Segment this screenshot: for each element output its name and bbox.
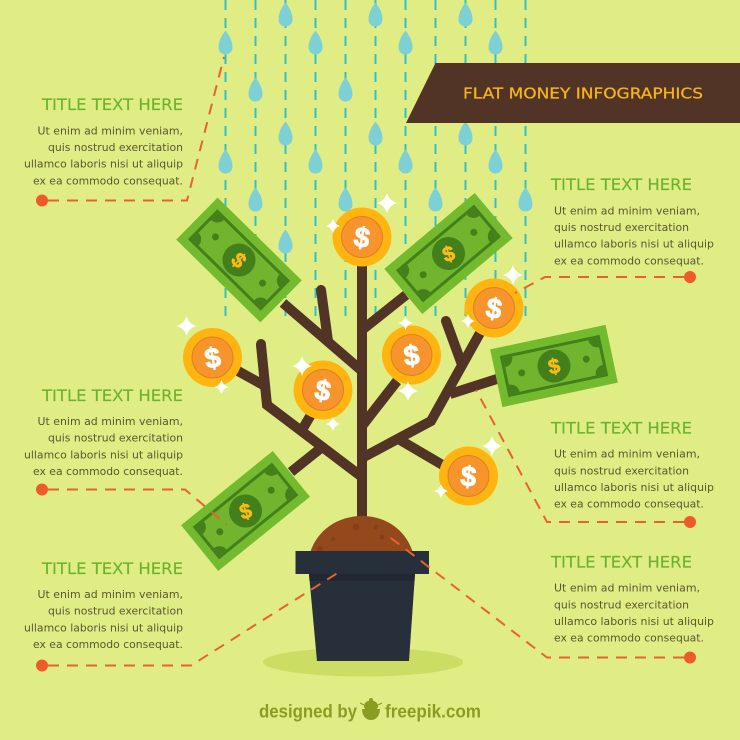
text block: middle left: ex ea commodo consequat. [33, 465, 183, 478]
money bill: top right [384, 193, 513, 314]
coin: upper right: $ [484, 292, 505, 325]
money bill: top right: $ [440, 242, 458, 267]
text block: middle left: quis nostrud exercitation [48, 432, 183, 445]
text block: middle left: Ut enim ad minim veniam, [38, 415, 183, 428]
money bill: lower left: $ [237, 499, 255, 525]
footer credit: freepik.com [385, 700, 481, 722]
money bill: right: $ [546, 354, 563, 379]
coin: left [183, 328, 242, 387]
text block: top right [550, 175, 714, 267]
money bill: lower left [181, 451, 310, 571]
text block: top right: quis nostrud exercitation [554, 221, 689, 234]
coin: left: $ [202, 341, 223, 375]
text block: middle left [24, 386, 183, 478]
text block: bottom left: Ut enim ad minim veniam, [38, 588, 183, 601]
sparkles [176, 193, 523, 498]
title banner [406, 63, 740, 123]
text block: middle right: quis nostrud exercitation [554, 464, 689, 477]
text block: bottom right: ex ea commodo consequat. [554, 632, 704, 645]
text block: bottom left [24, 559, 183, 651]
text block: middle right [550, 418, 714, 511]
coin: top centre: $ [352, 221, 373, 254]
text block: bottom left: quis nostrud exercitation [48, 605, 183, 618]
money bill: right [490, 325, 618, 407]
footer credit [259, 698, 481, 722]
text block: bottom left: ex ea commodo consequat. [33, 638, 183, 651]
connector: bottom left [36, 570, 342, 672]
text block: top right: ex ea commodo consequat. [554, 254, 704, 267]
plant pot shadow [263, 648, 463, 676]
text block: bottom right [550, 552, 714, 645]
money bill: top left [176, 198, 302, 322]
text block: bottom left: ullamco laboris nisi ut aliquip [24, 621, 183, 634]
text block: top left: ex ea commodo consequat. [33, 174, 183, 188]
connector: bottom right [387, 535, 696, 664]
title banner: FLAT MONEY INFOGRAPHICS [463, 84, 703, 102]
text block: middle left: TITLE TEXT HERE [41, 386, 183, 405]
coin: centre right: $ [402, 339, 421, 372]
connector: middle right [476, 390, 696, 528]
coin: upper right [464, 278, 524, 338]
plant pot [296, 551, 429, 661]
text block: bottom right: quis nostrud exercitation [554, 598, 689, 611]
coin: lower right [439, 446, 498, 506]
text block: middle right: TITLE TEXT HERE [550, 418, 692, 437]
text block: bottom right: TITLE TEXT HERE [550, 552, 692, 571]
connector: top left [36, 57, 224, 206]
text block: middle right: ullamco laboris nisi ut aliquip [554, 481, 714, 494]
connector: middle left [36, 484, 227, 525]
text block: bottom left: TITLE TEXT HERE [41, 559, 183, 578]
text block: bottom right: Ut enim ad minim veniam, [554, 582, 700, 595]
text block: top left: Ut enim ad minim veniam, [38, 124, 183, 138]
text block: middle left: ullamco laboris nisi ut aliquip [24, 448, 183, 461]
text block: top left: TITLE TEXT HERE [41, 95, 183, 114]
text block: top left [24, 95, 183, 188]
tree [238, 260, 500, 522]
text block: top left: ullamco laboris nisi ut aliquip [24, 158, 183, 171]
money bill: top left: $ [226, 248, 251, 273]
rain lines and drops [218, 0, 532, 322]
text block: top right: ullamco laboris nisi ut aliquip [554, 238, 714, 251]
footer credit: designed by [259, 700, 358, 722]
text block: middle right: Ut enim ad minim veniam, [554, 448, 700, 461]
coin: top centre [332, 208, 392, 266]
coin: centre right [382, 326, 441, 384]
soil [310, 516, 413, 553]
coin: centre left [294, 360, 352, 420]
text block: top left: quis nostrud exercitation [48, 141, 183, 154]
text block: middle right: ex ea commodo consequat. [554, 498, 704, 511]
text block: top right: TITLE TEXT HERE [550, 175, 692, 194]
coin: lower right: $ [459, 460, 478, 493]
text block: top right: Ut enim ad minim veniam, [554, 204, 700, 217]
coin: centre left: $ [312, 374, 334, 407]
text block: bottom right: ullamco laboris nisi ut aliquip [554, 615, 714, 628]
connector: top right [515, 271, 696, 293]
